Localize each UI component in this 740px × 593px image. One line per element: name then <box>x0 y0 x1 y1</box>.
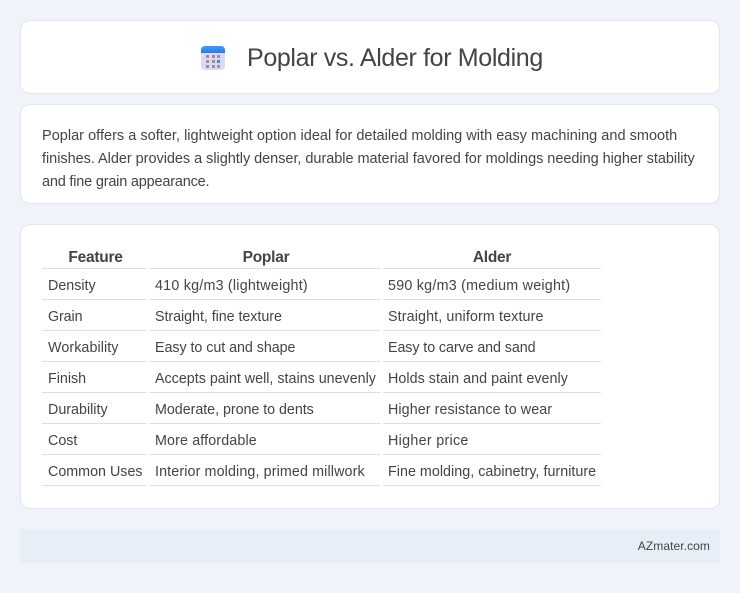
table rows: Accepts paint well, stains unevenly <box>155 371 376 387</box>
table rows: 410 kg/m3 (lightweight) <box>155 278 308 294</box>
table rows: Interior molding, primed millwork <box>155 464 365 480</box>
table rows: Straight, fine texture <box>155 309 282 325</box>
table rows: Durability <box>48 402 108 418</box>
table rows: Straight, uniform texture <box>388 309 544 325</box>
table rows: Easy to carve and sand <box>388 340 535 356</box>
footer bar <box>20 529 720 563</box>
table rows: Workability <box>48 340 119 356</box>
table rows: Common Uses <box>48 464 143 480</box>
table rows: Cost <box>48 433 77 449</box>
table rows: Holds stain and paint evenly <box>388 371 568 387</box>
table rows <box>42 268 601 486</box>
panel: description <box>20 104 720 204</box>
text block: summary: finishes. Alder provides a slightly denser, durable material favored for moldings needing higher stability <box>42 151 695 167</box>
table rows: 590 kg/m3 (medium weight) <box>388 278 570 294</box>
title: Poplar vs. Alder for Molding <box>247 44 543 72</box>
panel: title card <box>20 20 720 94</box>
table header: Poplar <box>243 249 289 266</box>
table rows: Higher resistance to wear <box>388 402 552 418</box>
table rows: Moderate, prone to dents <box>155 402 314 418</box>
text block: summary: and fine grain appearance. <box>42 174 209 190</box>
panel: comparison table <box>20 224 720 509</box>
table rows: Grain <box>48 309 82 325</box>
table rows: Density <box>48 278 96 294</box>
icon: calendar <box>201 46 225 70</box>
text block: summary: Poplar offers a softer, lightweight option ideal for detailed molding with easy machining and smooth <box>42 128 677 144</box>
table rows: Finish <box>48 371 86 387</box>
table rows: Higher price <box>388 433 469 449</box>
table rows: More affordable <box>155 433 257 449</box>
footer source text: AZmater.com <box>638 539 710 553</box>
table rows: Fine molding, cabinetry, furniture <box>388 464 596 480</box>
table rows: Easy to cut and shape <box>155 340 295 356</box>
text block: summary <box>42 128 695 190</box>
table header: Feature <box>68 249 123 266</box>
table header: Alder <box>473 249 511 266</box>
table header <box>68 249 512 266</box>
